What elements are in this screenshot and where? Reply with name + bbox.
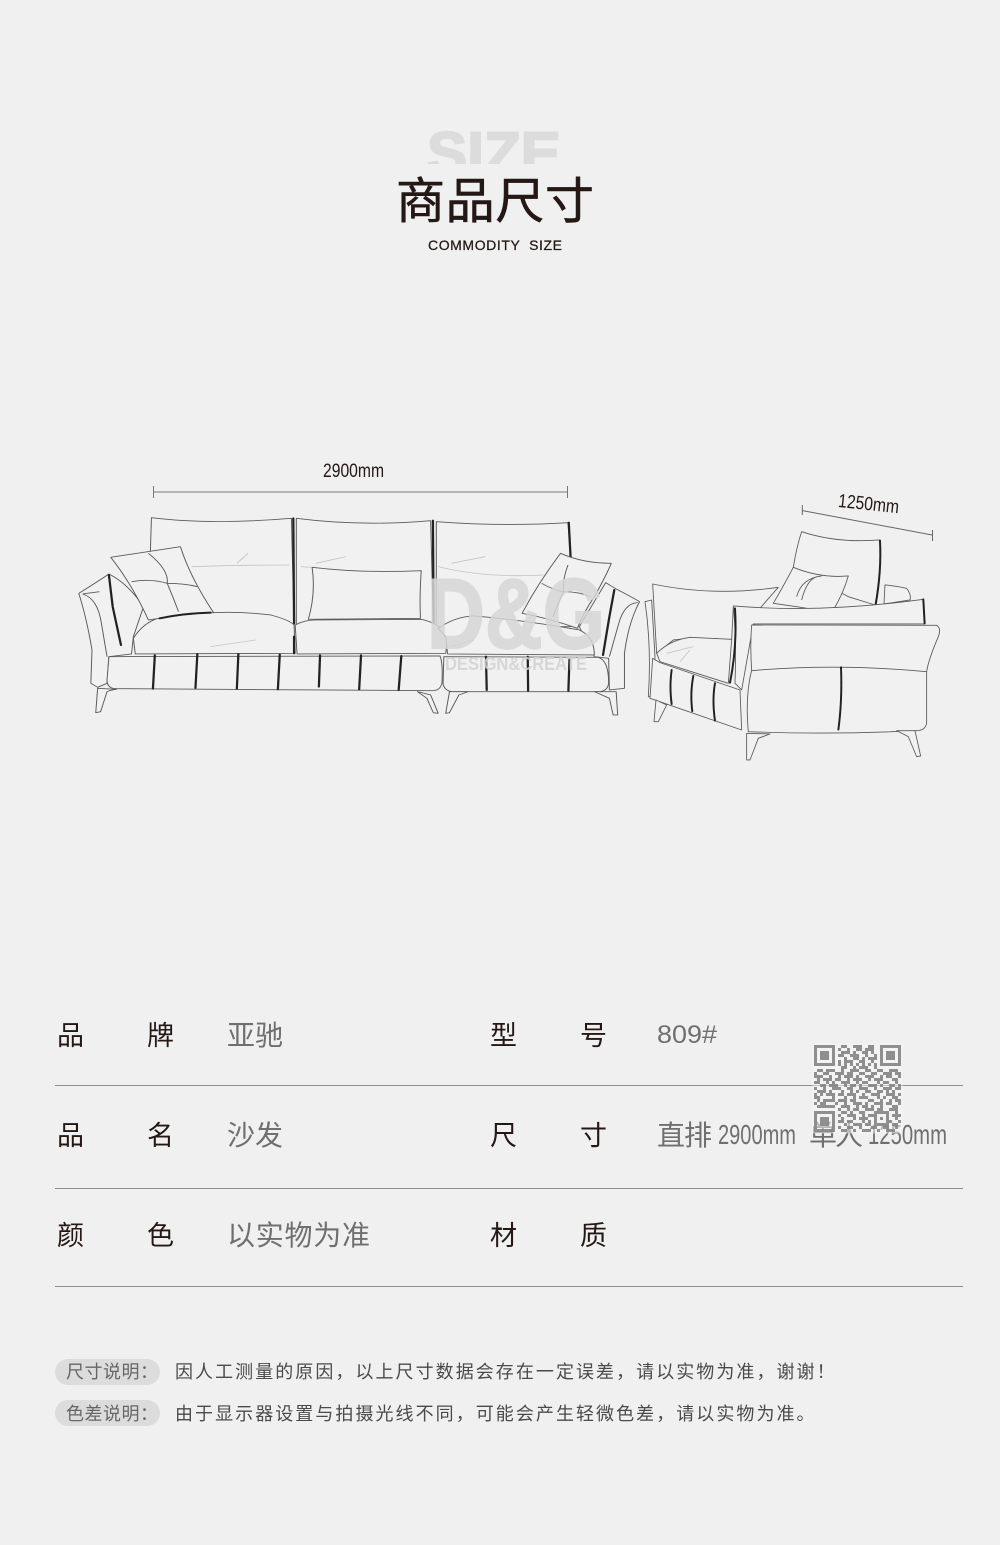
table row 2: name and size: 1250mm <box>868 1119 947 1150</box>
note 1: size disclaimer <box>55 1359 837 1385</box>
dimension: sofa width 2900mm: 2900mm <box>323 461 384 482</box>
title: ghost word SIZE: SIZE <box>427 120 561 187</box>
watermark: D&G DESIGN&CREATE: D&G <box>427 558 605 669</box>
table row 2: name and size <box>57 1119 947 1151</box>
table row 2: name and size: 寸 <box>580 1121 607 1151</box>
table row 1: brand and model: 亚驰 <box>227 1020 283 1051</box>
table row 3: colour and material: 以实物为准 <box>227 1220 370 1251</box>
table row 3: colour and material: 颜 <box>57 1221 84 1251</box>
dimension: sofa width 2900mm <box>153 461 568 498</box>
table row 2: name and size: 2900mm <box>718 1119 796 1150</box>
table row 3: colour and material: 材 <box>490 1221 517 1251</box>
table row 3: colour and material: 色 <box>147 1221 174 1251</box>
table row 1: brand and model: 型 <box>490 1021 517 1051</box>
note 2: colour disclaimer: 由于显示器设置与拍摄光线不同，可能会产生轻微色差，请以实物为准。 <box>175 1404 817 1424</box>
table row 2: name and size: 品 <box>57 1121 84 1151</box>
illustration: three-seat sofa line drawing <box>79 518 640 715</box>
table row 2: name and size: 尺 <box>490 1121 517 1151</box>
table row 2: name and size: 单人 <box>809 1120 863 1151</box>
dimension: armchair width 1250mm <box>802 491 932 541</box>
subheading: COMMODITY SIZE: COMMODITY SIZE <box>428 237 562 253</box>
note 1: size disclaimer: 尺寸说明： <box>66 1362 158 1382</box>
note 2: colour disclaimer: 色差说明： <box>66 1404 158 1424</box>
table row 3: colour and material <box>57 1220 607 1251</box>
table row 3: colour and material: 质 <box>580 1221 607 1251</box>
note 1: size disclaimer: 因人工测量的原因，以上尺寸数据会存在一定误差，请以实物为准，谢谢！ <box>175 1362 837 1382</box>
table row 1: brand and model: 牌 <box>147 1021 174 1051</box>
table row 2: name and size: 直排 <box>657 1120 712 1151</box>
heading: 商品尺寸: 商品尺寸 <box>396 175 594 229</box>
illustration: armchair line drawing <box>645 532 940 760</box>
note 2: colour disclaimer <box>55 1400 817 1426</box>
table row 2: name and size: 名 <box>147 1121 174 1151</box>
dimension: armchair width 1250mm: 1250mm <box>837 491 900 518</box>
table row 1: brand and model: 809# <box>657 1021 717 1049</box>
table row 1: brand and model: 号 <box>580 1021 607 1051</box>
watermark: D&G DESIGN&CREATE: DESIGN&CREATE <box>445 654 587 674</box>
table row 1: brand and model <box>57 1020 717 1051</box>
table row 1: brand and model: 品 <box>57 1021 84 1051</box>
QR code <box>812 1044 902 1134</box>
table row 2: name and size: 沙发 <box>227 1120 283 1151</box>
